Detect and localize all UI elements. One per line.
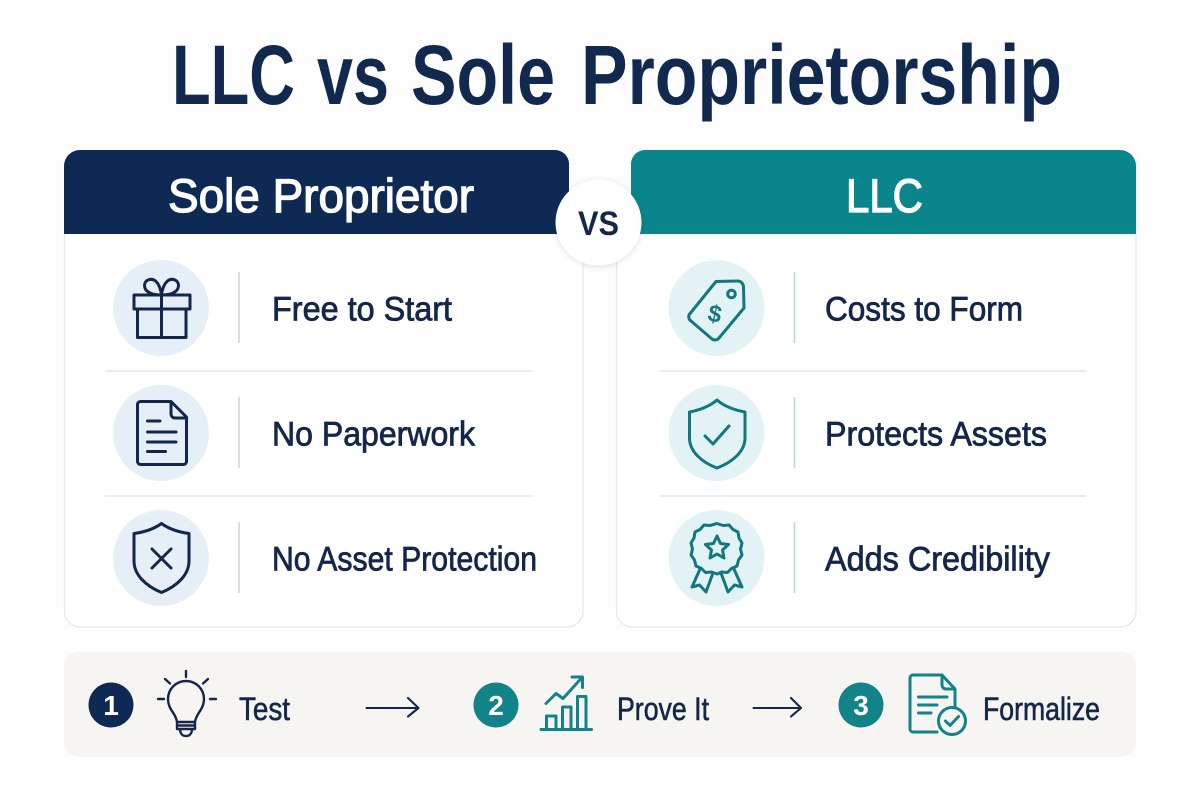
row: free to start	[113, 260, 452, 356]
icon: light bulb	[158, 671, 216, 736]
title: Proprietorship	[581, 28, 1062, 122]
step 2: prove it	[474, 677, 709, 730]
row: no paperwork: No Paperwork	[272, 416, 476, 454]
icon: document with check	[910, 675, 966, 734]
step 3: formalize	[838, 675, 1100, 734]
icon: shield with x	[113, 510, 209, 606]
icon: document	[113, 385, 209, 481]
row: no asset protection	[113, 510, 537, 606]
header: llc	[631, 150, 1136, 234]
step 1: test	[88, 671, 290, 736]
number badge 2	[474, 682, 518, 728]
number badge 3: 3	[853, 690, 869, 721]
number badge 1: 1	[103, 690, 119, 721]
card: llc body	[616, 230, 1136, 627]
row: adds credibility	[668, 510, 1051, 606]
title: LLC	[172, 28, 295, 122]
row: no asset protection: No Asset Protection	[272, 540, 537, 578]
step 1: test: Test	[239, 691, 290, 727]
row: costs to form	[668, 260, 1023, 356]
panel: path steps	[64, 652, 1136, 757]
arrow: test to prove it	[366, 698, 418, 716]
header: llc: LLC	[846, 169, 923, 222]
number badge 1	[88, 682, 134, 728]
panel: llc	[616, 150, 1136, 627]
row: protects assets	[668, 385, 1047, 481]
row: free to start: Free to Start	[272, 290, 452, 328]
row: no paperwork	[113, 385, 476, 481]
icon: shield with check	[668, 385, 764, 481]
row: adds credibility: Adds Credibility	[825, 540, 1051, 578]
vs badge: VS	[578, 205, 619, 243]
icon: growth chart	[541, 677, 592, 730]
step 3: formalize: Formalize	[983, 691, 1100, 727]
row: costs to form: Costs to Form	[825, 290, 1023, 328]
arrow: prove it to formalize	[754, 698, 801, 716]
number badge 3	[838, 682, 884, 728]
title: Sole	[411, 28, 555, 122]
panel: sole proprietor	[64, 150, 583, 627]
icon: gift	[113, 260, 209, 356]
icon: award rosette	[668, 510, 764, 606]
title: vs	[317, 28, 389, 122]
vs badge	[556, 180, 642, 266]
header: sole proprietor: Sole Proprietor	[168, 169, 474, 222]
header: sole proprietor	[64, 150, 569, 234]
step 2: prove it: Prove It	[617, 691, 709, 727]
row: protects assets: Protects Assets	[825, 416, 1047, 454]
card: sole proprietor body	[64, 230, 583, 627]
icon: price tag: $	[705, 300, 725, 329]
icon: price tag	[668, 260, 764, 356]
number badge 2: 2	[488, 690, 504, 721]
